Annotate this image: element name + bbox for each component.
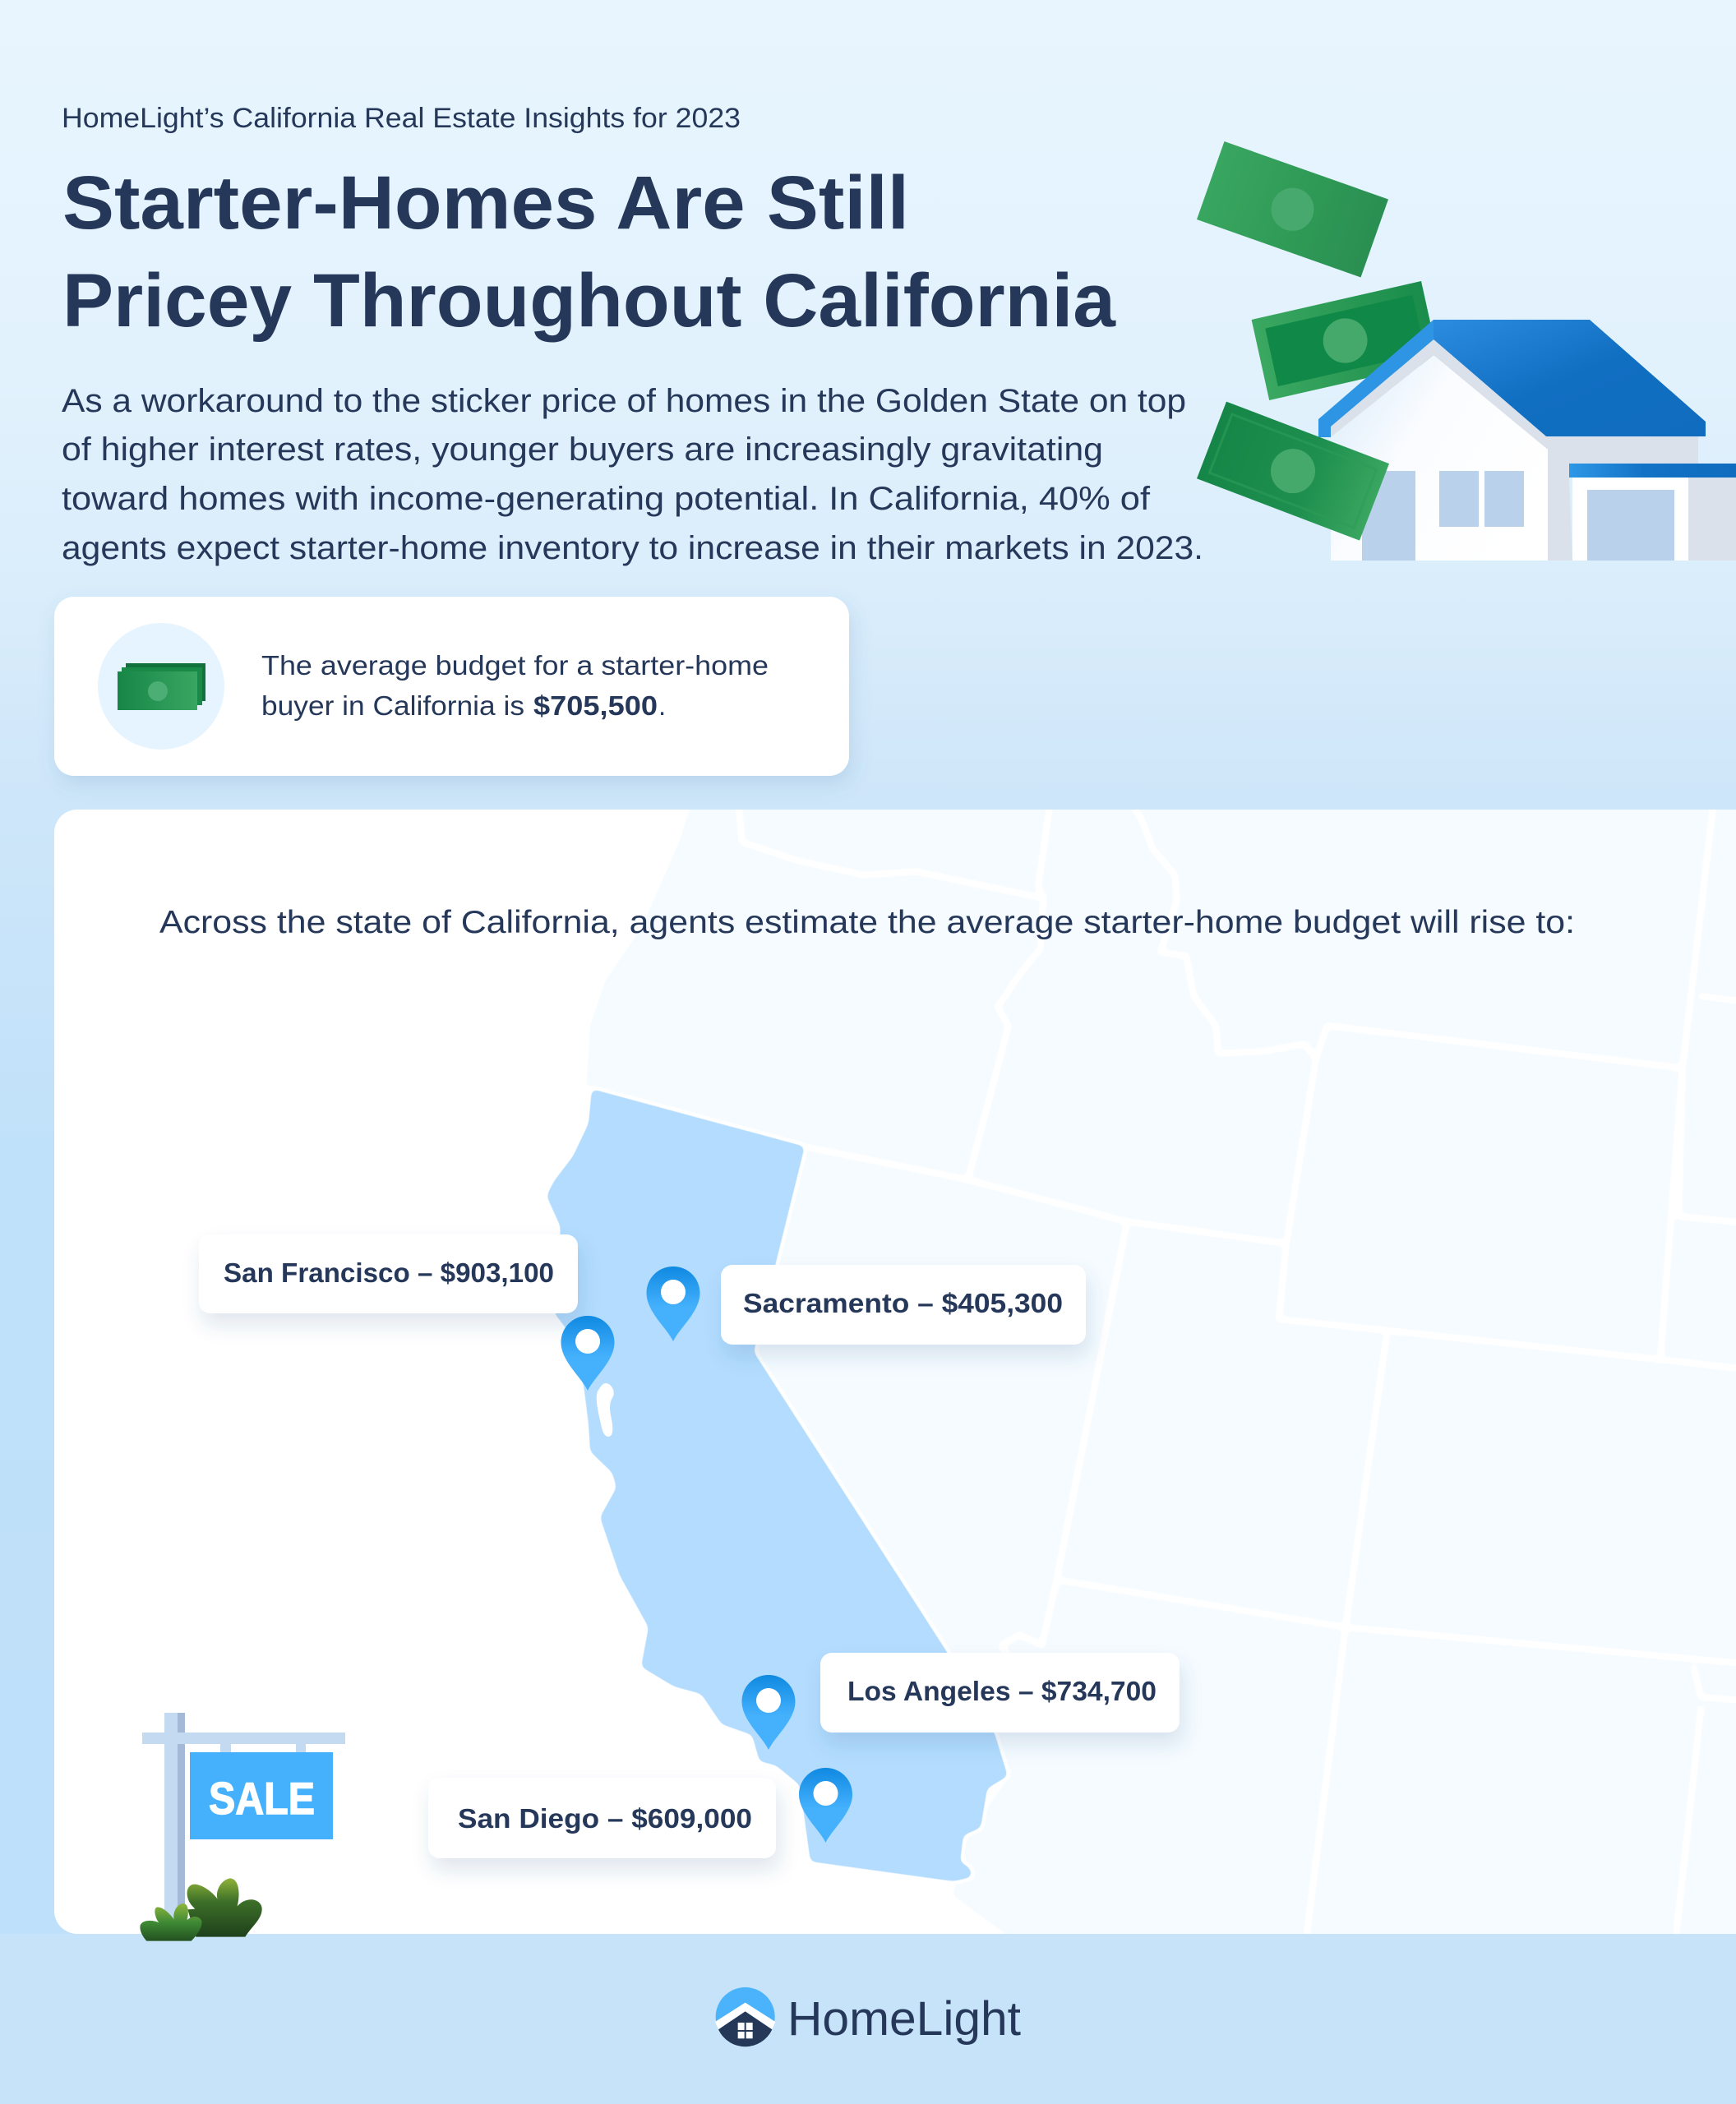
icon: house — [1318, 320, 1736, 561]
callout text: . — [658, 690, 666, 721]
sign hanger left — [220, 1744, 231, 1752]
small bush — [140, 1903, 201, 1941]
header eyebrow: HomeLight’s California Real Estate Insights for 2023 — [62, 103, 741, 134]
logo mark — [715, 1987, 775, 2046]
map: San Francisco bay — [597, 1383, 614, 1437]
callout text: The average budget for a starter-home — [261, 650, 769, 681]
intro paragraph: As a workaround to the sticker price of homes in the Golden State on top — [62, 383, 1186, 419]
map: California state shape — [547, 1089, 1008, 1881]
label: Los Angeles: Los Angeles – $734,700 — [847, 1676, 1157, 1706]
house garage wall — [1572, 478, 1688, 561]
callout text: $705,500 — [533, 690, 658, 721]
sign board — [190, 1752, 333, 1839]
gable roof edge — [1318, 320, 1434, 437]
label: San Diego: San Diego – $609,000 — [458, 1803, 752, 1834]
title — [62, 161, 1116, 343]
label: San Francisco: San Francisco – $903,100 — [224, 1257, 554, 1288]
icon: falling bill middle — [1252, 281, 1439, 400]
icon: for-sale sign — [142, 1713, 345, 1923]
roof gable trim — [1331, 339, 1548, 460]
door panel — [1362, 471, 1415, 561]
house side wall — [1546, 436, 1698, 561]
icon: falling bill top — [1197, 141, 1388, 277]
large bush — [187, 1878, 262, 1937]
window left — [1439, 471, 1479, 527]
sign hanger right — [296, 1744, 306, 1752]
sign crossbar — [142, 1733, 345, 1744]
footer band — [0, 1934, 1736, 2104]
panel: California map — [54, 761, 1736, 2009]
pin: San Diego — [799, 1768, 852, 1843]
title: Pricey Throughout California — [62, 259, 1116, 343]
label: Sacramento: Sacramento – $405,300 — [743, 1288, 1063, 1318]
illustration: falling money and house — [1197, 141, 1736, 561]
main roof — [1434, 320, 1706, 436]
porch roof band — [1569, 464, 1736, 478]
label: Sacramento — [721, 1265, 1086, 1345]
map: California outline — [755, 1151, 1010, 1884]
panel heading: Across the state of California, agents estimate the average starter-home budget will rise to: — [159, 905, 1575, 940]
map of neighbouring states — [547, 761, 1736, 2009]
label: Los Angeles — [820, 1653, 1180, 1733]
house front wall — [1331, 355, 1548, 561]
icon: falling bill bottom — [1197, 402, 1389, 541]
intro paragraph: agents expect starter-home inventory to increase in their markets in 2023. — [62, 530, 1203, 566]
callout text: buyer in California is — [261, 690, 524, 721]
title: Starter-Homes Are Still — [62, 161, 909, 245]
sign board: SALE — [209, 1773, 315, 1824]
footer logo: HomeLight — [715, 1987, 1021, 2046]
intro paragraph — [62, 383, 1203, 566]
sign post — [164, 1713, 185, 1923]
pin: Sacramento — [646, 1267, 700, 1341]
callout text — [261, 650, 769, 721]
callout card: average budget — [54, 597, 849, 776]
label: San Francisco — [199, 1234, 578, 1313]
pin: San Francisco — [561, 1316, 615, 1391]
label: San Diego — [428, 1778, 776, 1858]
logo wordmark: HomeLight — [787, 1992, 1021, 2046]
garage door — [1587, 490, 1674, 561]
intro paragraph: toward homes with income-generating potential. In California, 40% of — [62, 481, 1151, 517]
icon: stack of money — [98, 623, 224, 750]
icon: bushes — [140, 1878, 262, 1941]
window right — [1484, 471, 1524, 527]
pin: Los Angeles — [741, 1675, 796, 1750]
house right wing wall — [1688, 478, 1736, 561]
intro paragraph: of higher interest rates, younger buyers are increasingly gravitating — [62, 431, 1103, 468]
